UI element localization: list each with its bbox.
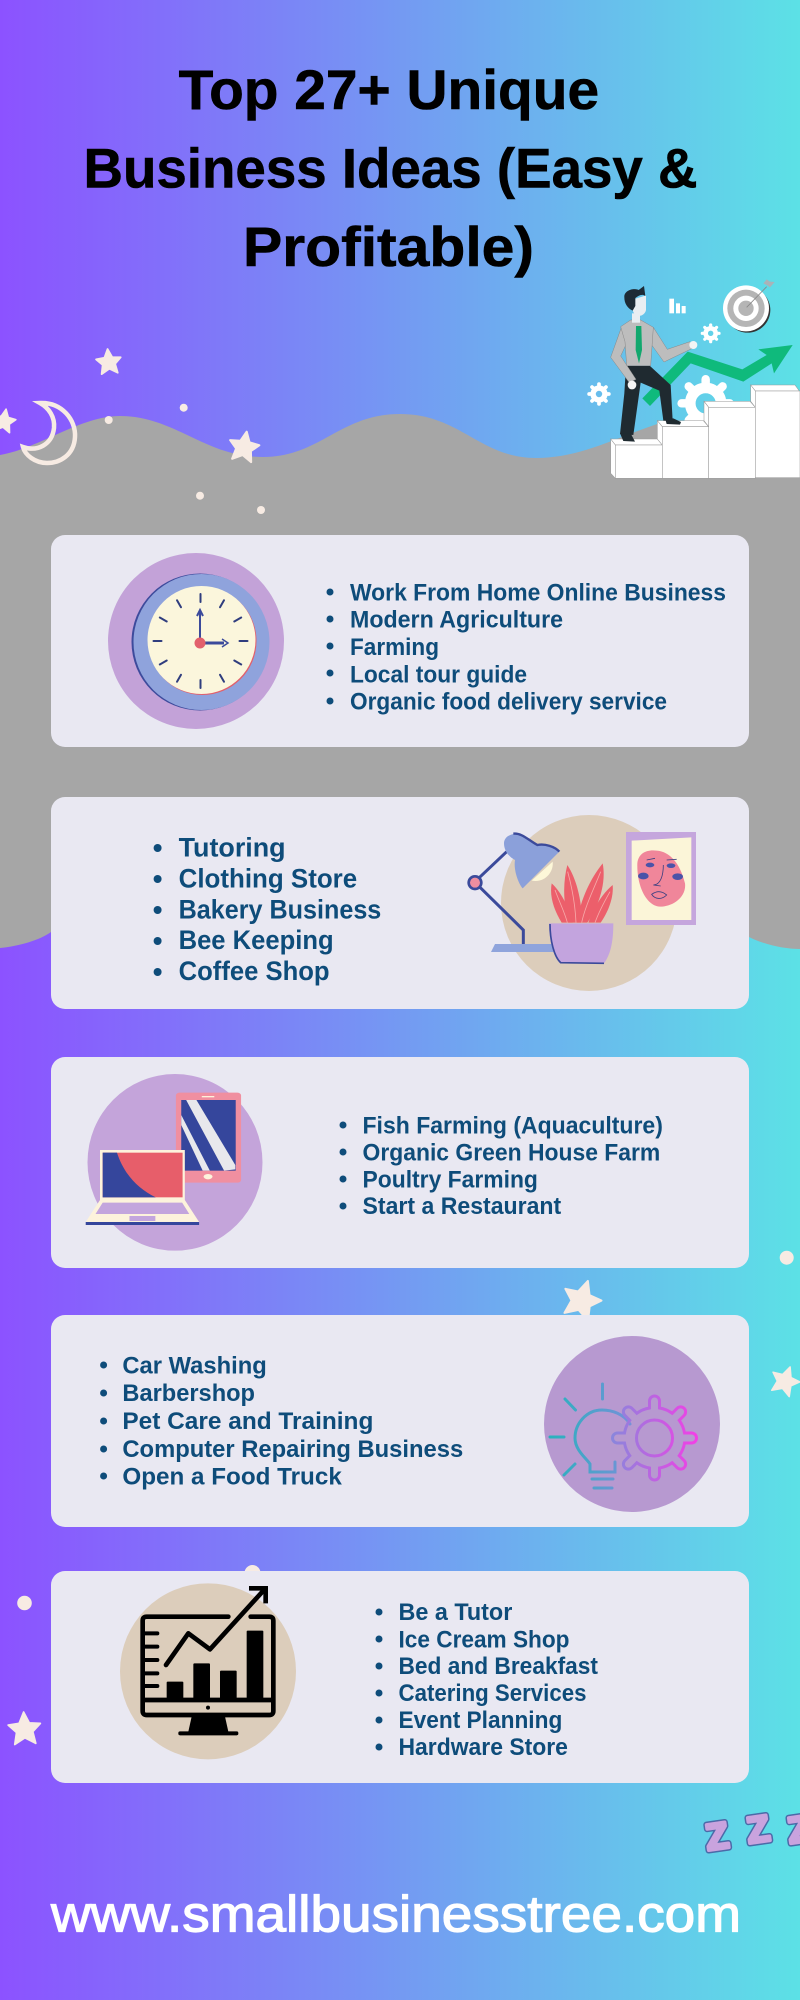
bullet list: Clothing Store [179, 863, 357, 893]
bullet list: Open a Food Truck [122, 1463, 342, 1490]
decoration: top stars and moon [0, 348, 265, 514]
icon: mini bar chart [669, 299, 686, 313]
bullet list: Computer Repairing Business [122, 1436, 463, 1463]
illustration: man climbing steps [588, 279, 800, 478]
bullet list: Farming [350, 634, 439, 661]
panel: card 2 with desk lamp [51, 797, 749, 1009]
icon: stair steps [611, 385, 800, 478]
bullet list: Work From Home Online Business [350, 580, 726, 607]
bullet list [340, 1112, 663, 1220]
panel: card 3 with laptop and tablet [51, 1057, 749, 1268]
bullet list: Coffee Shop [179, 956, 330, 986]
figure: businessman [611, 286, 697, 442]
decoration: sleeping Zs: Z [703, 1815, 731, 1858]
icon: growth arrow [642, 345, 793, 406]
card background [51, 535, 749, 747]
bullet list: Fish Farming (Aquaculture) [362, 1112, 663, 1139]
panel: card 1 with clock [51, 535, 749, 747]
bullet list: Poultry Farming [362, 1166, 538, 1193]
bullet list: Bee Keeping [179, 925, 334, 955]
icon: small gear left [588, 383, 610, 405]
bullet list: Bakery Business [179, 894, 381, 924]
bullet list [154, 833, 381, 986]
footer website url: www.smallbusinesstree.com [50, 1886, 741, 1943]
icon: monitor with rising chart [120, 1583, 296, 1759]
decoration: sleeping Zs: Z [744, 1808, 772, 1851]
icon: small gear right [701, 324, 720, 343]
bullet list: Bed and Breakfast [398, 1653, 598, 1680]
icon: clock [108, 553, 284, 729]
bullet list: Organic food delivery service [350, 688, 667, 715]
bullet list: Modern Agriculture [350, 607, 563, 634]
bullet list: Organic Green House Farm [362, 1139, 660, 1166]
bullet list [326, 580, 726, 715]
title: Top 27+ Unique [179, 58, 599, 121]
decoration: mid and lower stars and dots [7, 1251, 800, 1745]
decoration: sleeping Zs: Z [744, 1808, 772, 1851]
decoration: sleeping Zs: Z [703, 1815, 731, 1858]
title: Business Ideas (Easy & [84, 136, 698, 199]
card background [51, 1315, 749, 1527]
card background [51, 797, 749, 1009]
icon: target [723, 279, 775, 333]
grey wave band [0, 414, 800, 949]
title [84, 58, 698, 278]
icon: desk lamp, plant and portrait [469, 815, 696, 991]
bullet list: Tutoring [179, 833, 286, 863]
panel: card 5 with monitor chart [51, 1571, 749, 1783]
bullet list: Catering Services [398, 1680, 586, 1707]
icon: light bulb and gear [544, 1336, 720, 1512]
bullet list: Local tour guide [350, 661, 527, 688]
icon: laptop and tablet [86, 1074, 263, 1251]
bullet list: Start a Restaurant [362, 1193, 561, 1220]
panel: card 4 with bulb and gear [51, 1315, 749, 1527]
bullet list: Be a Tutor [398, 1599, 512, 1626]
decoration: sleeping Zs [703, 1808, 800, 1858]
bullet list [100, 1352, 463, 1490]
card background [51, 1057, 749, 1268]
bullet list: Ice Cream Shop [398, 1626, 570, 1653]
bullet list: Pet Care and Training [122, 1408, 373, 1435]
bullet list: Event Planning [398, 1707, 562, 1734]
bullet list: Car Washing [122, 1352, 267, 1379]
icon: large gear [678, 376, 733, 431]
title: Profitable) [243, 215, 534, 278]
bullet list: Hardware Store [398, 1734, 568, 1761]
bullet list: Barbershop [122, 1380, 255, 1407]
card background [51, 1571, 749, 1783]
bullet list [376, 1599, 598, 1761]
